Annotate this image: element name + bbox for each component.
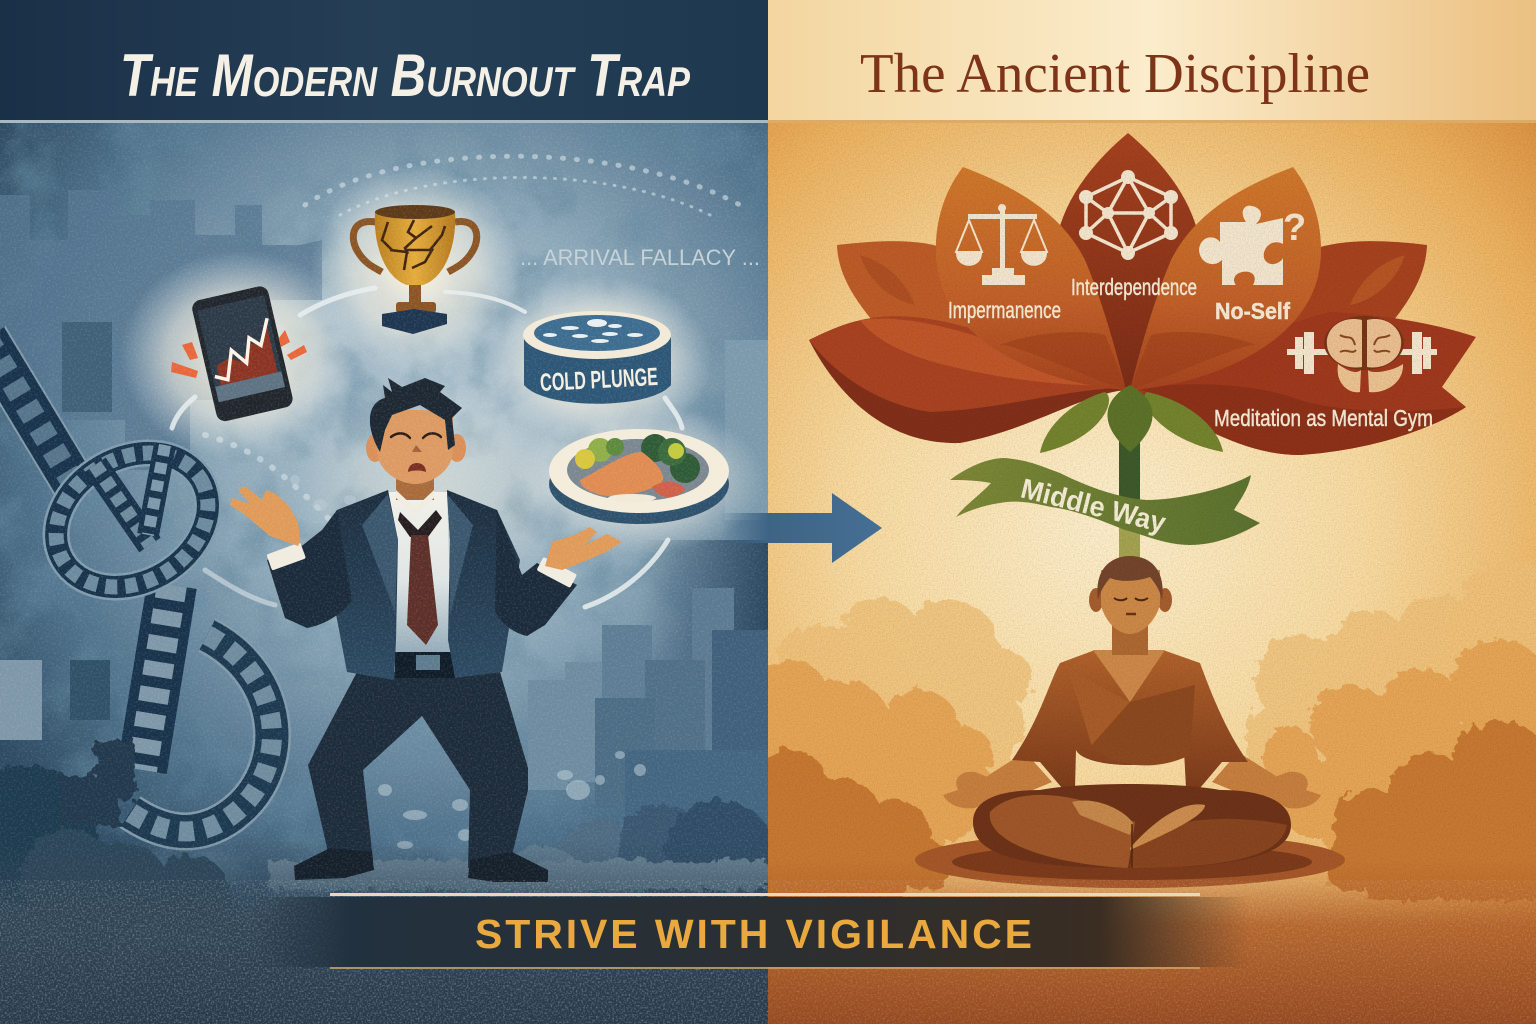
- dark bottom ground: [0, 840, 768, 1024]
- header: left: [0, 0, 768, 123]
- icon: alert burst marks: [171, 330, 307, 378]
- right hand: [545, 527, 622, 570]
- left hand: [230, 486, 300, 546]
- panel: modern burnout trap (left side): [0, 123, 768, 1024]
- head: [1089, 556, 1172, 655]
- left background: [0, 123, 768, 911]
- spatter blobs: [290, 475, 646, 849]
- stem: [1119, 440, 1140, 565]
- crossed legs: [973, 784, 1291, 868]
- icon: interdependence network: [1079, 170, 1178, 260]
- shirt: [388, 492, 452, 652]
- jacket: [322, 490, 520, 680]
- figure: stressed businessman: [230, 378, 622, 882]
- arrow: from trap to discipline: [720, 493, 882, 563]
- track: descending left: [0, 338, 74, 484]
- icon: puzzle piece with question mark: ?: [1283, 207, 1306, 249]
- label: impermanence: Impermanence: [948, 297, 1061, 323]
- tie: [398, 510, 442, 645]
- right arm: [495, 510, 577, 636]
- banner: middle way: [950, 458, 1260, 545]
- lower side petal left: [809, 316, 1125, 443]
- arms and hands: [943, 752, 1321, 808]
- dotted arc spray: [205, 156, 740, 520]
- robe folds: [1066, 650, 1195, 765]
- grain: [0, 0, 768, 1024]
- mid petal left: [936, 167, 1126, 390]
- center petal: [1054, 133, 1202, 392]
- panel: ancient discipline (right side): [750, 0, 1536, 1024]
- mid petal right: [1130, 167, 1321, 390]
- ground mounds: [0, 738, 768, 904]
- upper side petals: [837, 241, 1427, 345]
- label: meditation as mental gym: Meditation as Mental Gym: [1214, 405, 1433, 431]
- head: [366, 378, 466, 515]
- clouds: [750, 560, 1536, 900]
- icon: plate of food: [549, 429, 729, 524]
- slogan text: STRIVE WITH VIGILANCE: [475, 911, 1032, 957]
- label: interdependence: Interdependence: [1071, 274, 1197, 300]
- leaves: [1040, 385, 1223, 453]
- icon: phone with chart: [190, 285, 294, 423]
- title: the ancient discipline: The Ancient Discipline: [860, 43, 1370, 105]
- connecting arcs: [172, 288, 682, 607]
- trousers: [308, 672, 528, 868]
- icon: balance scales: [956, 204, 1047, 285]
- grain: [768, 0, 1536, 1024]
- city skyline right: [528, 588, 768, 840]
- icon: cold plunge tub: [523, 311, 671, 404]
- title: the modern burnout trap: The Modern Burnout Trap: [120, 42, 691, 109]
- footer banner: [250, 893, 1250, 969]
- labels on petals: [948, 274, 1433, 431]
- banner: middle way: Middle Way: [1018, 473, 1169, 539]
- arrival fallacy label: ... ARRIVAL FALLACY ...: [520, 245, 760, 270]
- lower side petal right: [1130, 312, 1476, 455]
- track: bottom curve: [130, 635, 272, 831]
- figure: meditating monk: [915, 556, 1345, 888]
- header: right: [768, 0, 1536, 123]
- torso robe: [1012, 650, 1248, 788]
- left arm: [267, 510, 352, 628]
- track: vertical support: [142, 585, 172, 770]
- icon: cracked trophy: [353, 205, 477, 334]
- track: loop: [42, 440, 220, 600]
- icon glows: [124, 170, 757, 564]
- icon: cold plunge tub: COLD PLUNGE: [539, 363, 659, 397]
- mat: [915, 832, 1345, 888]
- right background: [768, 0, 1536, 1024]
- lotus flower: [809, 133, 1476, 565]
- dark bottom ground: [768, 860, 1536, 1024]
- roller coaster: [0, 338, 272, 831]
- icon: brain with dumbbell: [1287, 316, 1437, 392]
- label: no-self: No-Self: [1215, 298, 1290, 324]
- belt: [395, 652, 457, 678]
- shoes: [294, 848, 548, 882]
- city skyline back left: [0, 190, 768, 740]
- icon: puzzle piece with question mark: [1199, 206, 1306, 285]
